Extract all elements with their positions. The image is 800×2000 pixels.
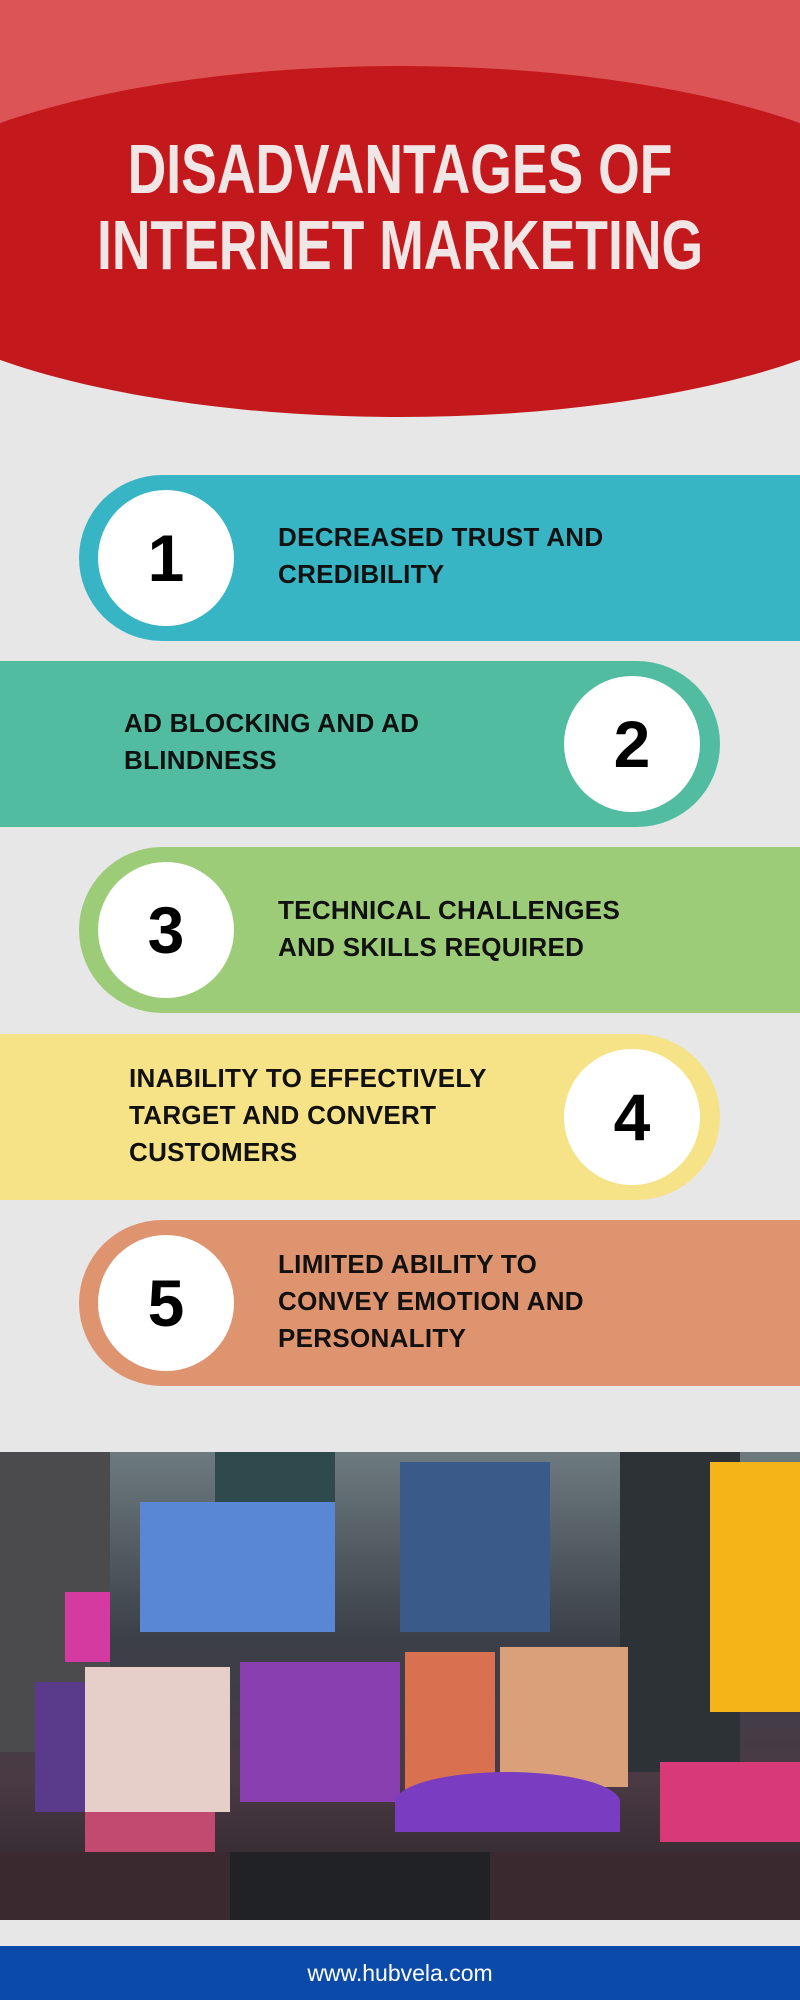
number 5: 5	[148, 1266, 184, 1340]
text 1: DECREASED TRUST AND	[278, 522, 603, 552]
text 1	[278, 522, 603, 589]
title: INTERNET MARKETING	[97, 206, 703, 284]
text 2: AD BLOCKING AND AD	[124, 708, 419, 738]
number 2	[564, 676, 700, 812]
text 4: TARGET AND CONVERT	[129, 1100, 436, 1130]
text 3: TECHNICAL CHALLENGES	[278, 895, 620, 925]
item 3	[79, 847, 800, 1013]
footer	[0, 1946, 800, 2000]
item 1	[79, 475, 800, 641]
text 5: PERSONALITY	[278, 1323, 466, 1353]
number 1: 1	[148, 521, 184, 595]
number 3	[98, 862, 234, 998]
text 5: CONVEY EMOTION AND	[278, 1286, 584, 1316]
number 4	[564, 1049, 700, 1185]
title: DISADVANTAGES OF	[128, 130, 672, 208]
header background	[0, 0, 800, 417]
text 3	[278, 895, 620, 962]
text 2: BLINDNESS	[124, 745, 277, 775]
item 4	[0, 1034, 720, 1200]
item 2	[0, 661, 720, 827]
number 3: 3	[148, 893, 184, 967]
text 4: CUSTOMERS	[129, 1137, 297, 1167]
footer: www.hubvela.com	[307, 1960, 493, 1986]
number 1	[98, 490, 234, 626]
item 5	[79, 1220, 800, 1386]
number 2: 2	[614, 707, 650, 781]
number 4: 4	[614, 1080, 650, 1154]
title	[97, 130, 703, 284]
text 2	[124, 708, 419, 775]
text 4	[129, 1063, 487, 1167]
text 3: AND SKILLS REQUIRED	[278, 932, 584, 962]
text 5: LIMITED ABILITY TO	[278, 1249, 537, 1279]
text 5	[278, 1249, 584, 1353]
text 4: INABILITY TO EFFECTIVELY	[129, 1063, 487, 1093]
number 5	[98, 1235, 234, 1371]
photo: times square	[0, 1452, 800, 1920]
text 1: CREDIBILITY	[278, 559, 445, 589]
